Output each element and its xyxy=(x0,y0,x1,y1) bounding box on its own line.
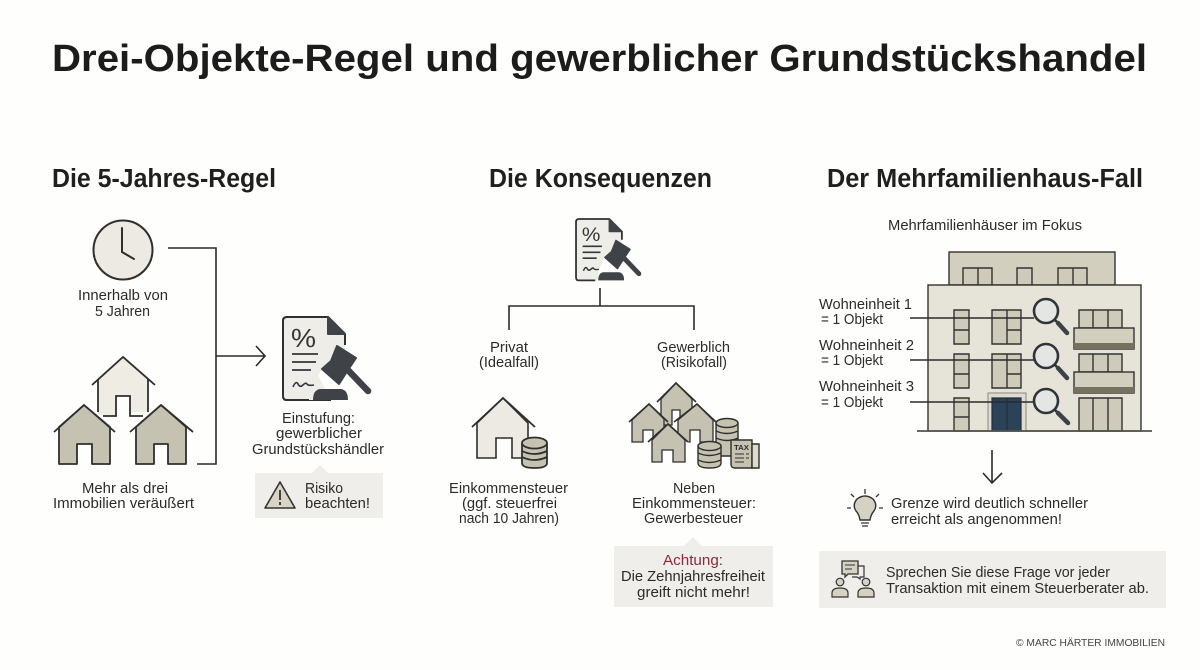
icon: clock xyxy=(94,220,152,280)
callout: Steuerberater xyxy=(819,551,1166,608)
text: Neben Einkommensteuer Gewerbesteuer: Einkommensteuer: xyxy=(632,495,756,512)
callout: Risiko beachten: beachten! xyxy=(305,495,370,512)
subheading: Mehrfamilienhäuser im Fokus xyxy=(888,217,1082,234)
panel: Mehrfamilienhaus-Fall xyxy=(819,165,1166,608)
icon: document with gavel xyxy=(576,219,639,280)
icon: three houses xyxy=(54,357,193,464)
panel: Konsequenzen xyxy=(449,165,773,607)
text: Einstufung gewerblicher Grundstückshändler: Einstufung: xyxy=(282,410,355,427)
panel: 5-Jahres-Regel xyxy=(52,165,384,518)
text: Neben Einkommensteuer Gewerbesteuer xyxy=(632,480,756,527)
label: Wohneinheit 2: Wohneinheit 2 xyxy=(819,337,914,354)
icon: warning triangle xyxy=(265,482,295,508)
callout: Achtung: Die Zehnjahresfreiheit xyxy=(621,568,766,585)
text: Einstufung gewerblicher Grundstückshändler: gewerblicher xyxy=(276,425,362,442)
text: Grenze wird deutlich schneller: Grenze wird deutlich schneller xyxy=(891,495,1088,512)
arrow: down xyxy=(983,450,1002,483)
text: Innerhalb von 5 Jahren: Innerhalb von xyxy=(78,287,168,304)
text: Grenze wird deutlich schneller: erreicht als angenommen! xyxy=(891,511,1062,528)
text: Neben Einkommensteuer Gewerbesteuer: Gewerbesteuer xyxy=(644,510,743,527)
callout: Steuerberater: Transaktion mit einem Steuerberater ab. xyxy=(886,580,1149,597)
heading: Die Konsequenzen: Die Konsequenzen xyxy=(489,165,712,193)
callout: Steuerberater: Sprechen Sie diese Frage vor jeder xyxy=(886,564,1110,581)
icon: magnifier 3 xyxy=(1034,389,1068,423)
icon: consultation xyxy=(832,561,874,597)
text: Innerhalb von 5 Jahren xyxy=(78,287,168,320)
text: Einkommensteuer privat: (ggf. steuerfrei xyxy=(462,495,557,512)
text: Mehr als drei Immobilien veräußert: Mehr als drei xyxy=(82,480,168,497)
callout: Achtung xyxy=(614,537,773,607)
icon: document with gavel: % xyxy=(291,323,316,353)
text: Grenze wird deutlich schneller xyxy=(891,495,1088,528)
heading: Der Mehrfamilienhaus-Fall: Der Mehrfamilienhaus-Fall xyxy=(827,165,1143,193)
text: Mehr als drei Immobilien veräußert xyxy=(53,480,195,512)
heading: Die 5-Jahres-Regel: Die 5-Jahres-Regel xyxy=(52,165,276,193)
callout: Achtung: Achtung: xyxy=(663,552,723,569)
label: Wohneinheit 2: = 1 Objekt xyxy=(821,352,884,369)
label: Wohneinheit 1 xyxy=(819,296,1034,328)
label: Wohneinheit 3: = 1 Objekt xyxy=(821,394,884,411)
icon: houses with coins and tax sheet: TAX xyxy=(734,445,749,452)
text: Innerhalb von 5 Jahren: 5 Jahren xyxy=(95,303,150,320)
text: Neben Einkommensteuer Gewerbesteuer: Neben xyxy=(673,480,715,497)
icon: magnifier 1 xyxy=(1034,299,1067,333)
icon: document with gavel: % xyxy=(582,225,600,246)
text: Einstufung gewerblicher Grundstückshändler: Grundstückshändler xyxy=(252,441,384,458)
callout: Achtung: greift nicht mehr! xyxy=(637,584,750,601)
label: Gewerblich: (Risikofall) xyxy=(661,354,727,371)
bracket connector xyxy=(168,248,216,464)
label: Wohneinheit 1: Wohneinheit 1 xyxy=(819,296,912,313)
label: Privat: Privat xyxy=(490,339,529,356)
callout: Risiko beachten: Risiko xyxy=(305,480,343,497)
label: Privat: (Idealfall) xyxy=(479,354,539,371)
label: Wohneinheit 2 xyxy=(819,337,1034,369)
copyright: © MARC HÄRTER IMMOBILIEN xyxy=(1016,637,1165,649)
label: Privat xyxy=(479,339,539,371)
tree connector xyxy=(509,288,694,330)
icon: light bulb xyxy=(847,489,883,526)
title: Drei-Objekte-Regel und gewerblicher Grundstückshandel xyxy=(52,38,1147,80)
text: Einstufung gewerblicher Grundstückshändler xyxy=(252,410,384,458)
text: Einkommensteuer privat xyxy=(449,480,568,527)
icon: houses with coins and tax sheet xyxy=(629,383,759,468)
callout: Risiko beachten xyxy=(255,465,383,518)
label: Wohneinheit 3 xyxy=(819,378,1034,411)
label: Gewerblich: Gewerblich xyxy=(657,339,730,356)
arrow xyxy=(216,346,265,366)
label: Wohneinheit 1: = 1 Objekt xyxy=(821,311,884,328)
text: Einkommensteuer privat: Einkommensteuer xyxy=(449,480,568,497)
label: Gewerblich xyxy=(657,339,730,371)
label: Wohneinheit 3: Wohneinheit 3 xyxy=(819,378,914,395)
icon: magnifier 2 xyxy=(1034,344,1067,378)
text: Mehr als drei Immobilien veräußert: Immobilien veräußert xyxy=(53,495,195,512)
icon: house with coins xyxy=(472,398,547,468)
icon: document with gavel xyxy=(283,317,368,400)
text: Einkommensteuer privat: nach 10 Jahren) xyxy=(459,510,559,527)
illustration: apartment building xyxy=(917,252,1152,431)
